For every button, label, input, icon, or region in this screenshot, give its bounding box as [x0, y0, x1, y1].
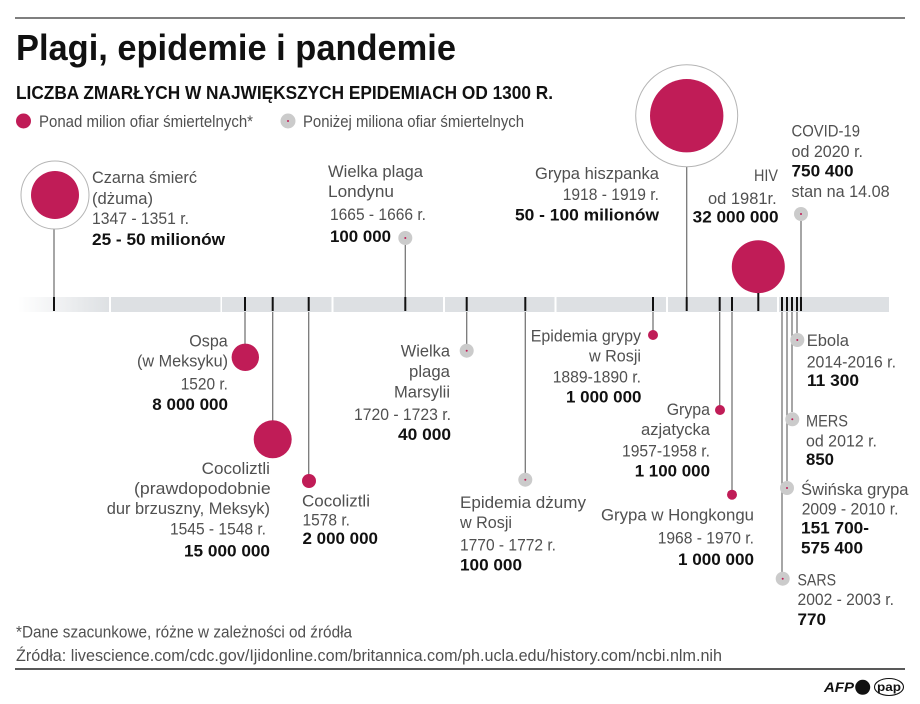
event: Grypa w Hongkongu: Grypa w Hongkongu: [601, 506, 754, 525]
event: Wielka plaga Marsylii: 40 000: [398, 425, 451, 444]
event: Epidemia dżumy w Rosji: w Rosji: [459, 513, 512, 532]
event: Świńska grypa: 2009 - 2010 r.: [802, 499, 898, 518]
event: Grypa azjatycka: Grypa: [667, 400, 711, 419]
event: Grypa hiszpanka: [515, 65, 738, 297]
event: Wielka plaga Marsylii: plaga: [409, 362, 451, 381]
event: Cocoliztli 1545: (prawdopodobnie: [134, 479, 271, 498]
event: Cocoliztli 1578: Cocoliztli: [302, 492, 370, 511]
event: MERS: [785, 312, 877, 469]
event: Cocoliztli 1578: 1578 r.: [302, 511, 350, 530]
event: Czarna śmierć: (dżuma): [92, 189, 153, 208]
event: Świńska grypa: 151 700-: [801, 518, 869, 537]
legend: [16, 112, 524, 131]
event: SARS: 770: [798, 610, 826, 629]
event: COVID-19: od 2020 r.: [792, 142, 863, 161]
event: Grypa hiszpanka: 50 - 100 milionów: [515, 206, 660, 225]
event: SARS: SARS: [798, 571, 836, 590]
event: Wielka plaga Londynu: [328, 162, 426, 297]
event: HIV: [693, 166, 785, 293]
event: Epidemia grypy w Rosji: [531, 312, 658, 407]
event: Wielka plaga Londynu: 100 000: [330, 227, 391, 246]
event: Ospa: (w Meksyku): [137, 352, 228, 371]
event: Cocoliztli 1545: Cocoliztli: [202, 459, 270, 478]
event: Ospa: [137, 312, 259, 414]
title: Plagi, epidemie i pandemie: [16, 27, 456, 68]
event: Świńska grypa: [780, 312, 909, 557]
event: Czarna śmierć: [21, 161, 226, 297]
event: HIV: od 1981r.: [708, 189, 777, 208]
footnote: *Dane szacunkowe, różne w zależności od źródła: [16, 622, 352, 641]
event: MERS: od 2012 r.: [806, 432, 877, 451]
event: Grypa azjatycka: [622, 312, 725, 481]
event: Cocoliztli 1578: 2 000 000: [302, 529, 378, 548]
event: Wielka plaga Marsylii: Marsylii: [394, 382, 450, 401]
event: COVID-19: [792, 122, 890, 297]
event: Grypa azjatycka: azjatycka: [641, 420, 711, 439]
subtitle: LICZBA ZMARŁYCH W NAJWIĘKSZYCH EPIDEMIACH OD 1300 R.: [16, 82, 553, 103]
event: Ospa: 8 000 000: [152, 395, 228, 414]
event: Cocoliztli 1545: [107, 312, 292, 561]
event: Epidemia grypy w Rosji: Epidemia grypy: [531, 327, 641, 346]
event: COVID-19: COVID-19: [792, 122, 860, 141]
event: HIV: 32 000 000: [693, 208, 778, 227]
event: Grypa hiszpanka: Grypa hiszpanka: [535, 164, 660, 183]
event: MERS: 850: [806, 450, 834, 469]
event: HIV: HIV: [754, 166, 779, 185]
event: Wielka plaga Londynu: 1665 - 1666 r.: [330, 205, 426, 224]
event: Grypa w Hongkongu: 1968 - 1970 r.: [658, 528, 754, 547]
event: Cocoliztli 1545: 1545 - 1548 r.: [170, 519, 266, 538]
logos: AFP and PAP: [823, 678, 904, 696]
event: Świńska grypa: 575 400: [801, 538, 863, 557]
event: Cocoliztli 1578: [302, 312, 378, 548]
event: COVID-19: 750 400: [792, 162, 854, 181]
event: SARS: [776, 312, 894, 629]
event: Grypa w Hongkongu: [601, 312, 754, 569]
timeline bar: [18, 297, 889, 312]
event: Grypa w Hongkongu: 1 000 000: [678, 550, 754, 569]
event: Epidemia dżumy w Rosji: Epidemia dżumy: [460, 493, 586, 512]
event: Czarna śmierć: Czarna śmierć: [92, 168, 197, 187]
sources: Źródła: livescience.com/cdc.gov/Ijidonline.com/britannica.com/ph.ucla.edu/history.com/ncbi.nlm.nih: [16, 646, 722, 665]
legend: over a million: Ponad milion ofiar śmiertelnych*: [39, 112, 253, 131]
event: Grypa hiszpanka: 1918 - 1919 r.: [563, 185, 659, 204]
event: Ebola: 11 300: [807, 371, 859, 390]
event: Wielka plaga Marsylii: 1720 - 1723 r.: [354, 405, 451, 424]
event: SARS: 2002 - 2003 r.: [798, 590, 894, 609]
event: Cocoliztli 1545: 15 000 000: [184, 542, 270, 561]
event: Epidemia grypy w Rosji: 1889-1890 r.: [553, 367, 641, 386]
legend: under a million: Poniżej miliona ofiar śmiertelnych: [303, 112, 524, 131]
event: Wielka plaga Londynu: Wielka plaga: [328, 162, 424, 181]
event: COVID-19: stan na 14.08: [792, 182, 890, 201]
event: Świńska grypa: Świńska grypa: [801, 480, 909, 499]
event: Ospa: Ospa: [189, 332, 228, 351]
event: Wielka plaga Londynu: Londynu: [328, 182, 394, 201]
timeline ticks: [54, 293, 801, 311]
event: MERS: MERS: [806, 412, 848, 431]
event: Ebola: Ebola: [807, 331, 850, 350]
logos: AFP and PAP: AFP: [823, 679, 855, 695]
event: Ospa: 1520 r.: [181, 374, 228, 393]
event: Grypa azjatycka: 1957-1958 r.: [622, 442, 710, 461]
event: Epidemia grypy w Rosji: 1 000 000: [566, 388, 642, 407]
event: Grypa azjatycka: 1 100 000: [635, 462, 710, 481]
event: Wielka plaga Marsylii: [354, 312, 474, 444]
event: Epidemia grypy w Rosji: w Rosji: [588, 347, 641, 366]
event: Czarna śmierć: 25 - 50 milionów: [92, 230, 226, 249]
event: Epidemia dżumy w Rosji: 1770 - 1772 r.: [460, 536, 556, 555]
event: Ebola: 2014-2016 r.: [807, 352, 896, 371]
event: Cocoliztli 1545: dur brzuszny, Meksyk): [107, 499, 270, 518]
event: Ebola: [790, 312, 896, 390]
event: Epidemia dżumy w Rosji: [459, 312, 586, 575]
event: Czarna śmierć: 1347 - 1351 r.: [92, 209, 189, 228]
event: Wielka plaga Marsylii: Wielka: [401, 342, 451, 361]
event: Epidemia dżumy w Rosji: 100 000: [460, 556, 522, 575]
logos: AFP and PAP: pap: [877, 680, 901, 694]
